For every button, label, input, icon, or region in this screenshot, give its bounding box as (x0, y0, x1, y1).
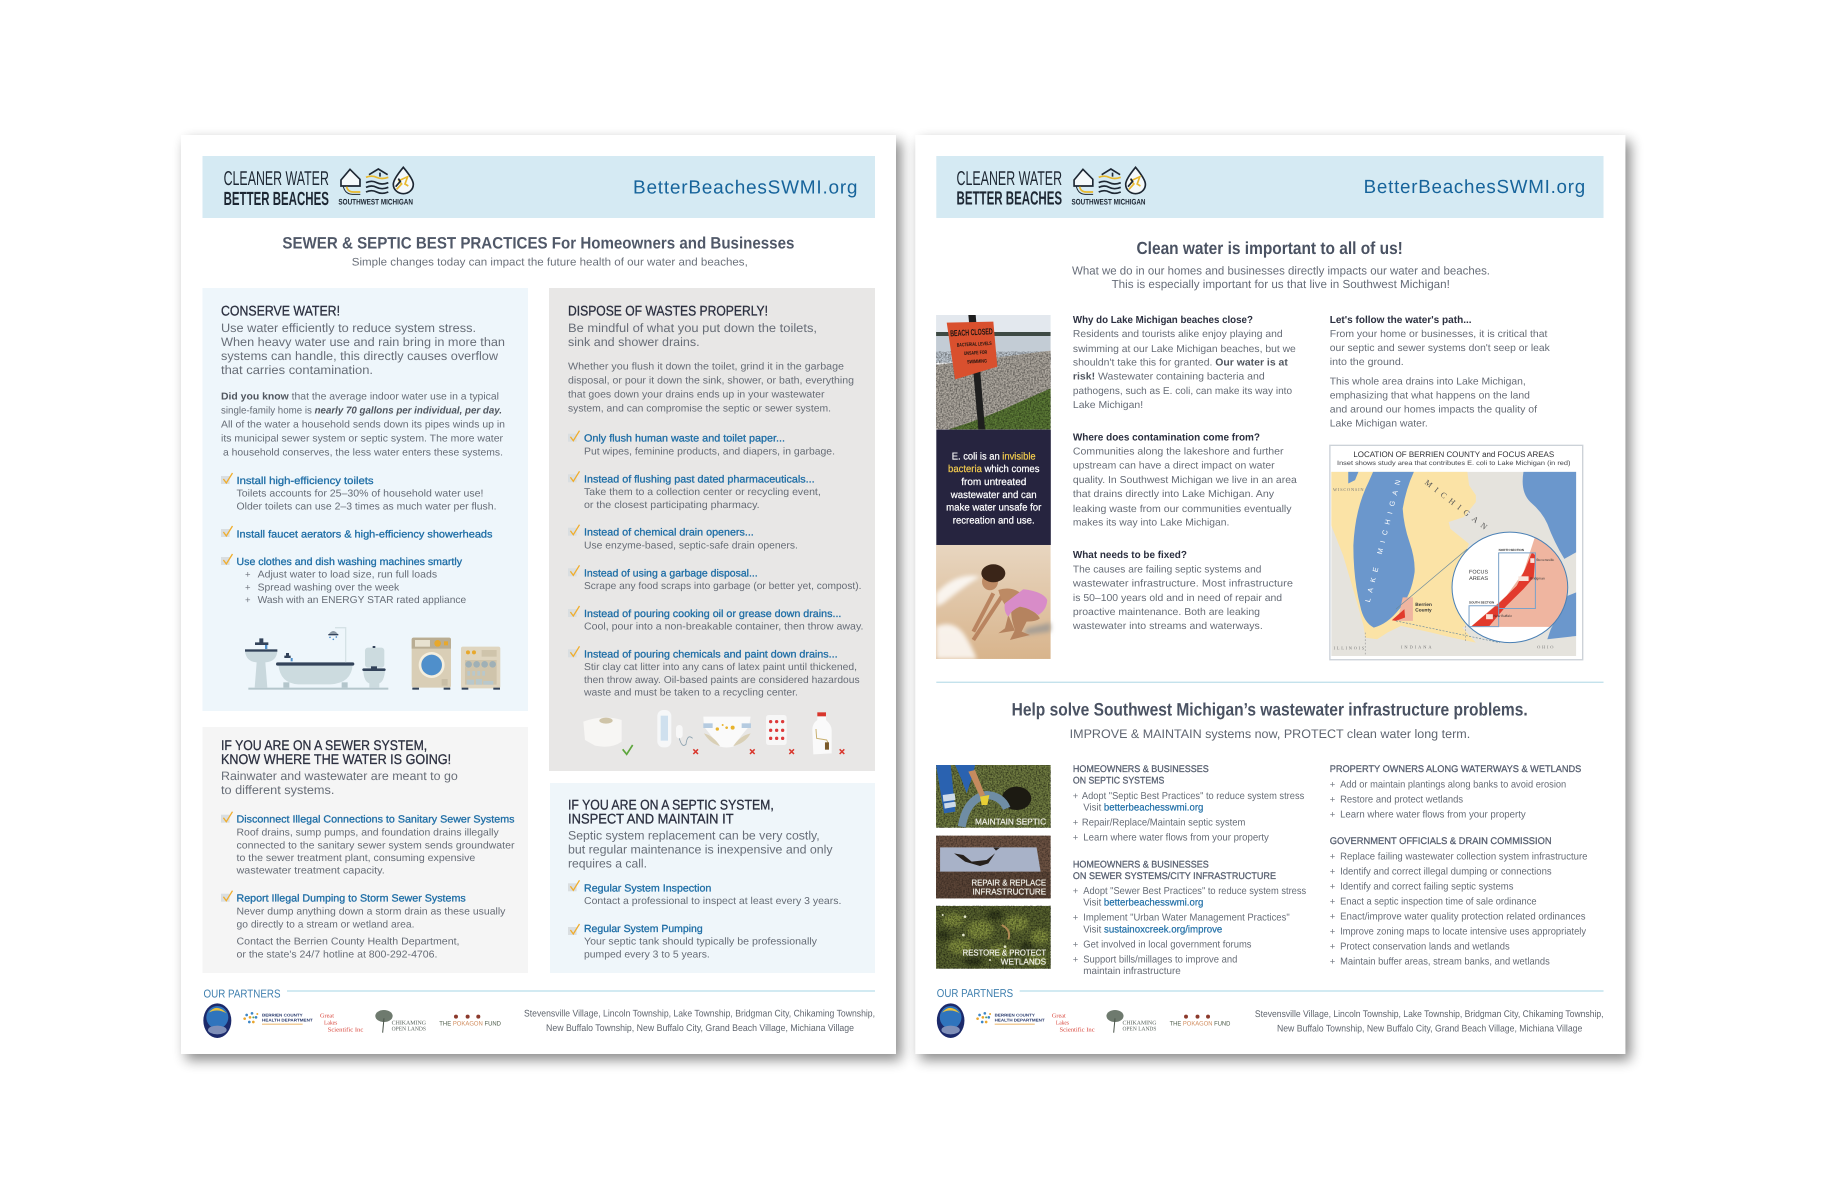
heading: sewer system: KNOW WHERE THE WATER IS GOING! (221, 751, 451, 767)
checklist: pharmaceuticals (568, 471, 821, 511)
did you know text: All of the water a household sends down its pipes winds up in (221, 419, 505, 430)
actions: property owners: + (1330, 794, 1336, 805)
photo: beach closed sign (936, 315, 1051, 429)
checklist: faucets (221, 526, 492, 540)
text column: why and where (1072, 315, 1297, 632)
heading: septic system: IF YOU ARE ON A SEPTIC SYSTEM, (568, 796, 774, 812)
map: Berrien County and focus areas: AREAS (1469, 576, 1488, 581)
lead text: When heavy water use and rain bring in more than (221, 335, 505, 349)
checklist: washing machines (221, 554, 467, 606)
page shadow: right (920, 141, 1630, 1060)
logo (957, 167, 1146, 210)
callout: e. coli: E. coli is an invisible (952, 451, 1036, 462)
logo: BETTER BEACHES (224, 189, 329, 210)
did you know text: a household conserves, the less water enters these systems. (223, 447, 503, 458)
checklist: cooking oil: Cool, pour into a non-breakable container, then throw away. (584, 622, 863, 633)
map: Berrien County and focus areas: NORTH SECTION (1499, 549, 1524, 552)
partners section: OUR PARTNERS (937, 988, 1013, 1000)
where does contamination come from: upstream can have a direct impact on water (1073, 461, 1275, 472)
checklist: chemicals and paint: Instead of pouring chemicals and paint down drains... (584, 649, 838, 660)
why do beaches close: Lake Michigan! (1073, 400, 1143, 411)
actions: sewer homeowners: ON SEWER SYSTEMS/CITY INFRASTRUCTURE (1073, 871, 1276, 882)
lead text: Septic system replacement can be very costly, (568, 828, 820, 842)
text column: water's path: From your home or businesses, it is critical that (1330, 329, 1548, 340)
checklist: toilets: Install high-efficiency toilets (236, 476, 374, 487)
actions: government officials: Improve zoning maps to locate intensive uses appropriately (1340, 927, 1586, 938)
logo (224, 167, 413, 210)
actions: septic homeowners: Visit betterbeachesswmi.org (1083, 803, 1203, 814)
logo: SOUTHWEST MICHIGAN (1072, 198, 1146, 207)
photo: beach closed sign: BACTERIAL LEVELS (957, 341, 992, 348)
why do beaches close: shouldn't take this for granted. Our water is at (1073, 357, 1289, 368)
text column: water's path: emphasizing that what happens on the land (1330, 391, 1530, 402)
checklist: illegal connections: connected to the sanitary sewer system sends groundwater (236, 840, 515, 851)
partners section: OUR PARTNERS (204, 988, 281, 1000)
logo: CLEANER WATER (224, 168, 329, 190)
map: Berrien County and focus areas: Inset shows study area that contributes E. coli to Lake Michigan (in red) (1337, 460, 1570, 467)
subheading: improve and maintain: IMPROVE & MAINTAIN systems now, PROTECT clean water long term. (1070, 727, 1470, 741)
lead text: Use water efficiently to reduce system stress. (221, 321, 476, 335)
did you know text: Did you know that the average indoor water use in a typical (221, 391, 499, 402)
body text: Whether you flush it down the toilet, grind it in the garbage (568, 361, 844, 372)
lead text: Rainwater and wastewater are meant to go (221, 769, 458, 783)
photo: beach closed sign: UNSAFE FOR (964, 349, 987, 356)
checklist: garbage disposal (568, 565, 862, 592)
text column: water's path: Let's follow the water's path... (1330, 315, 1472, 326)
photo: beach closed sign: SWIMMING (967, 358, 987, 365)
callout: e. coli: bacteria which comes (948, 464, 1039, 475)
actions: government officials: GOVERNMENT OFFICIALS & DRAIN COMMISSION (1330, 836, 1552, 847)
actions: sewer homeowners (1073, 859, 1306, 977)
callout: e. coli: make water unsafe for (946, 503, 1042, 514)
what needs to be fixed: proactive maintenance. Both are leaking (1073, 607, 1260, 618)
photo: repair and replace infrastructure (936, 836, 1051, 898)
map: Berrien County and focus areas: Stevensville (1536, 559, 1554, 562)
actions: government officials: + (1330, 957, 1336, 968)
photo: beach closed sign: BEACH CLOSED (950, 326, 993, 338)
did you know text: single-family home is nearly 70 gallons per individual, per day. (221, 405, 502, 416)
actions: sewer homeowners: maintain infrastructure (1083, 966, 1181, 977)
lead text (568, 321, 817, 349)
logo: CLEANER WATER (957, 168, 1062, 190)
checklist: chemicals and paint (568, 646, 860, 699)
body text (568, 361, 854, 414)
checklist: cooking oil: Instead of pouring cooking oil or grease down drains... (584, 609, 841, 620)
partners section: New Buffalo Township, New Buffalo City, Grand Beach Village, Michiana Village (546, 1023, 854, 1034)
map: Berrien County and focus areas: County (1415, 607, 1432, 613)
what needs to be fixed: wastewater into streams and waterways. (1072, 621, 1263, 632)
actions: government officials: + (1330, 911, 1336, 922)
checklist: pumping: Your septic tank should typically be professionally (584, 937, 817, 948)
actions: government officials: + (1330, 866, 1336, 877)
partners section (937, 988, 1604, 1038)
actions: sewer homeowners: HOMEOWNERS & BUSINESSES (1073, 859, 1209, 870)
actions: sewer homeowners: Adopt "Sewer Best Practices" to reduce system stress (1083, 886, 1306, 897)
actions: government officials: + (1330, 896, 1336, 907)
lead text: Be mindful of what you put down the toilets, (568, 321, 817, 335)
lead text (221, 321, 505, 377)
actions: septic homeowners: Learn where water flows from your property (1083, 833, 1269, 844)
checklist: pumping (568, 924, 817, 961)
checklist: illegal dumping (221, 891, 505, 960)
checklist: inspection (568, 880, 841, 907)
lead text: systems can handle, this directly causes overflow (221, 349, 498, 363)
lead text (568, 828, 834, 870)
map: Berrien County and focus areas: FOCUS (1469, 569, 1488, 575)
where does contamination come from (1073, 433, 1297, 529)
why do beaches close: Residents and tourists alike enjoy playing and (1073, 329, 1283, 340)
photo: child on beach (936, 545, 1051, 659)
actions: property owners: + (1330, 809, 1336, 820)
checklist: chemicals and paint: waste and must be taken to a recycling center. (583, 688, 798, 699)
lead text (221, 769, 458, 797)
illustration: bathroom and appliances (245, 628, 500, 690)
header band (936, 156, 1604, 218)
where does contamination come from: leaking waste from our communities eventually (1073, 504, 1292, 515)
map: Berrien County and focus areas: New Buffalo (1494, 615, 1512, 618)
partners section: New Buffalo Township, New Buffalo City, Grand Beach Village, Michiana Village (1277, 1023, 1582, 1034)
checklist: chemicals and paint: Stir clay cat litter into any cans of latex paint until thickened, (584, 662, 857, 673)
header band (202, 156, 875, 218)
checklist: toilets: Older toilets can use 2–3 times as much water per flush. (236, 501, 496, 512)
map: Berrien County and focus areas (1330, 445, 1583, 660)
what needs to be fixed (1072, 550, 1293, 632)
checklist: washing machines: + (245, 582, 251, 593)
heading: sewer system (221, 737, 451, 767)
actions: sewer homeowners: + (1073, 913, 1079, 924)
what needs to be fixed: The causes are failing septic systems and (1073, 564, 1261, 576)
website url: BetterBeachesSWMI.org (633, 177, 858, 198)
actions: property owners (1330, 764, 1581, 820)
heading: septic system (568, 796, 774, 826)
page: clean water is important (915, 135, 1625, 1054)
checklist: inspection: Contact a professional to inspect at least every 3 years. (584, 896, 841, 907)
text column: water's path (1330, 315, 1551, 429)
checklist: illegal connections: Disconnect Illegal Connections to Sanitary Sewer Systems (236, 815, 514, 826)
checklist: illegal connections: wastewater treatment capacity. (235, 866, 385, 877)
checklist: washing machines: Spread washing over the week (258, 582, 400, 593)
photo: repair and replace infrastructure: REPAIR & REPLACE (972, 877, 1046, 887)
checklist: pharmaceuticals: Instead of flushing past dated pharmaceuticals... (584, 474, 815, 485)
actions: government officials: + (1330, 851, 1336, 862)
intro text (1072, 264, 1490, 291)
checklist: pumping: pumped every 3 to 5 years. (584, 950, 710, 961)
actions: government officials: + (1330, 927, 1336, 938)
checklist: toilet paper: Put wipes, feminine products, and diapers, in garbage. (584, 446, 835, 457)
callout: e. coli (936, 430, 1051, 545)
checklist: pumping: Regular System Pumping (584, 924, 703, 935)
actions: sewer homeowners: Support bills/millages to improve and (1083, 955, 1237, 966)
actions: sewer homeowners: Visit sustainoxcreek.org/improve (1083, 924, 1223, 935)
partners section (203, 988, 875, 1038)
map: Berrien County and focus areas: LOCATION OF BERRIEN COUNTY and FOCUS AREAS (1353, 450, 1554, 459)
heading: help solve: Help solve Southwest Michigan’s wastewater infrastructure problems. (1012, 699, 1528, 719)
actions: property owners: PROPERTY OWNERS ALONG WATERWAYS & WETLANDS (1330, 764, 1581, 775)
checklist: illegal connections (221, 812, 515, 877)
actions: sewer homeowners: Get involved in local government forums (1083, 939, 1252, 950)
checklist: toilets (221, 473, 496, 512)
checklist: illegal dumping: Report Illegal Dumping to Storm Sewer Systems (236, 894, 466, 905)
actions: sewer homeowners: + (1073, 886, 1079, 897)
why do beaches close (1073, 315, 1296, 411)
callout: e. coli: from untreated (961, 477, 1026, 488)
did you know text (221, 391, 505, 458)
photo: restore and protect wetlands: RESTORE & PROTECT (963, 947, 1047, 957)
panel: conserve water (202, 288, 528, 711)
photo: repair and replace infrastructure: INFRASTRUCTURE (972, 887, 1046, 897)
map: Berrien County and focus areas: SOUTH SECTION (1469, 601, 1494, 604)
heading: conserve water: CONSERVE WATER! (221, 302, 340, 318)
text column: water's path: This whole area drains into Lake Michigan, (1330, 377, 1526, 388)
map: Berrien County and focus areas: Bridgman (1530, 577, 1545, 581)
checklist: pharmaceuticals: Take them to a collection center or recycling event, (584, 487, 821, 498)
intro text: What we do in our homes and businesses directly impacts our water and beaches. (1072, 264, 1490, 277)
actions: property owners: Restore and protect wetlands (1340, 794, 1463, 805)
intro text: This is especially important for us that live in Southwest Michigan! (1112, 278, 1450, 291)
photo: maintain septic (936, 765, 1051, 828)
map: Berrien County and focus areas: OHIO (1537, 645, 1553, 650)
lead text: that carries contamination. (221, 363, 373, 377)
checklist: pharmaceuticals: or the closest participating pharmacy. (584, 500, 760, 511)
photo: restore and protect wetlands: WETLANDS (1001, 957, 1046, 967)
where does contamination come from: Communities along the lakeshore and further (1073, 447, 1284, 458)
actions: government officials: Protect conservation lands and wetlands (1340, 942, 1510, 953)
text column: water's path: our septic and sewer systems don't seep or leak (1330, 343, 1551, 354)
actions: government officials: Identify and correct failing septic systems (1340, 881, 1513, 892)
panel: sewer system (202, 727, 528, 973)
checklist: washing machines: Adjust water to load size, run full loads (258, 570, 437, 581)
photo: maintain septic: MAINTAIN SEPTIC (975, 816, 1046, 826)
panel: dispose of wastes (549, 288, 875, 771)
actions: government officials: Identify and correct illegal dumping or connections (1340, 866, 1552, 877)
why do beaches close: risk! Wastewater containing bacteria and (1073, 371, 1265, 382)
logo: BETTER BEACHES (957, 188, 1062, 210)
website url: BetterBeachesSWMI.org (1364, 177, 1585, 198)
checklist: toilet paper (568, 431, 835, 457)
checklist: illegal dumping: go directly to a stream or wetland area. (236, 919, 414, 930)
what needs to be fixed: What needs to be fixed? (1073, 550, 1187, 561)
actions: septic homeowners: + (1073, 791, 1079, 802)
title: SEWER & SEPTIC BEST PRACTICES For Homeowners and Businesses (282, 235, 794, 253)
body text: system, and can compromise the septic or sewer system. (568, 403, 831, 414)
checklist: washing machines: + (245, 595, 251, 606)
actions: government officials: Enact a septic inspection time of sale ordinance (1340, 896, 1537, 907)
checklist: illegal dumping: or the state's 24/7 hotline at 800-292-4706. (236, 949, 438, 960)
map: Berrien County and focus areas: LAKE MICHIGAN (1364, 479, 1402, 603)
checklist: drain openers: Use enzyme-based, septic-safe drain openers. (584, 540, 798, 551)
checklist: inspection: Regular System Inspection (584, 883, 712, 894)
actions: septic homeowners: HOMEOWNERS & BUSINESSES (1073, 764, 1209, 775)
photo: restore and protect wetlands (936, 906, 1051, 969)
checklist: garbage disposal: Instead of using a garbage disposal... (584, 568, 758, 579)
what needs to be fixed: is 50–100 years old and in need of repair and (1073, 593, 1282, 604)
lead text: to different systems. (221, 783, 334, 797)
map: Berrien County and focus areas: WISCONSIN (1333, 487, 1364, 492)
actions: septic homeowners: + (1073, 818, 1079, 829)
partners section: Stevensville Village, Lincoln Township, Lake Township, Bridgman City, Chikaming Township, (1255, 1009, 1604, 1020)
panel: septic system (550, 783, 875, 973)
page shadow: left (186, 141, 901, 1060)
heading: septic system: INSPECT AND MAINTAIN IT (568, 810, 734, 826)
actions: septic homeowners: ON SEPTIC SYSTEMS (1073, 776, 1164, 787)
checklist: illegal connections: to the sewer treatment plant, consuming expensive (236, 853, 476, 864)
map: Berrien County and focus areas: ILLINOIS (1334, 645, 1364, 650)
checklist: drain openers (568, 525, 798, 551)
checklist: drain openers: Instead of chemical drain openers... (584, 528, 754, 539)
checklist: illegal dumping: Never dump anything down a storm drain as these usually (236, 907, 505, 918)
checklist: faucets: Install faucet aerators & high-efficiency showerheads (236, 529, 492, 540)
subtitle: Simple changes today can impact the future health of our water and beaches, (352, 257, 748, 269)
checklist: illegal dumping: Contact the Berrien County Health Department, (236, 937, 460, 948)
text column: water's path: into the ground. (1330, 357, 1404, 368)
callout: e. coli: wastewater and can (950, 490, 1037, 501)
title: clean water: Clean water is important to all of us! (1137, 238, 1403, 258)
where does contamination come from: that drains directly into Lake Michigan. Any (1073, 489, 1274, 500)
actions: sewer homeowners: Visit betterbeachesswmi.org (1083, 898, 1203, 909)
partners section: Stevensville Village, Lincoln Township, Lake Township, Bridgman City, Chikaming Township, (524, 1009, 875, 1020)
why do beaches close: pathogens, such as E. coli, can make its way into (1073, 386, 1292, 397)
page: sewer and septic best practices (181, 135, 896, 1054)
checklist: toilet paper: Only flush human waste and toilet paper... (584, 434, 785, 445)
map: Berrien County and focus areas: INDIANA (1401, 645, 1432, 650)
body text: disposal, or pour it down the sink, shower, or bath, everything (568, 375, 854, 386)
lead text: requires a call. (568, 856, 647, 870)
actions: sewer homeowners: + (1073, 939, 1079, 950)
actions: property owners: Add or maintain plantings along banks to avoid erosion (1340, 779, 1566, 790)
actions: septic homeowners: Adopt "Septic Best Practices" to reduce system stress (1082, 791, 1304, 802)
what needs to be fixed: wastewater infrastructure. Most infrastructure (1072, 578, 1293, 589)
actions: sewer homeowners: + (1073, 955, 1079, 966)
body text: that goes down your drains ends up in your wastewater (568, 389, 825, 400)
actions: government officials: Maintain buffer areas, stream banks, and wetlands (1340, 957, 1550, 968)
actions: sewer homeowners: Implement "Urban Water Management Practices" (1083, 913, 1290, 924)
actions: property owners: Learn where water flows from your property (1340, 809, 1526, 820)
divider (936, 682, 1604, 683)
icons: flushable and non-flushable items (583, 710, 844, 754)
actions: septic homeowners: + (1073, 833, 1079, 844)
actions: government officials: Replace failing wastewater collection system infrastructure (1340, 851, 1588, 862)
why do beaches close: Why do Lake Michigan beaches close? (1073, 315, 1253, 326)
map: Berrien County and focus areas: MICHIGAN (1423, 478, 1489, 532)
lead text: but regular maintenance is inexpensive and only (568, 842, 834, 856)
checklist: cooking oil (568, 606, 863, 633)
where does contamination come from: Where does contamination come from? (1073, 433, 1260, 444)
text column: water's path: and around our homes impacts the quality of (1330, 404, 1537, 416)
heading: sewer system: IF YOU ARE ON A SEWER SYSTEM, (221, 737, 427, 753)
heading: dispose of wastes: DISPOSE OF WASTES PROPERLY! (568, 302, 768, 318)
why do beaches close: swimming at our Lake Michigan beaches, but we (1073, 344, 1296, 355)
checklist: washing machines: Wash with an ENERGY STAR rated appliance (258, 595, 467, 606)
actions: septic homeowners (1073, 764, 1304, 844)
actions: government officials (1330, 836, 1588, 968)
where does contamination come from: quality. In Southwest Michigan we live in an area (1073, 475, 1297, 486)
checklist: washing machines: + (245, 570, 251, 581)
logo: SOUTHWEST MICHIGAN (338, 197, 413, 206)
where does contamination come from: makes its way into Lake Michigan. (1073, 518, 1229, 529)
text column: water's path: Lake Michigan water. (1330, 418, 1428, 429)
checklist: chemicals and paint: then throw away. Oil-based paints are considered hazardous (584, 675, 860, 686)
actions: government officials: + (1330, 942, 1336, 953)
actions: property owners: + (1330, 779, 1336, 790)
actions: government officials: Enact/improve water quality protection related ordinances (1340, 911, 1586, 922)
did you know text: its municipal sewer system or septic system. The more water (221, 433, 504, 444)
actions: government officials: + (1330, 881, 1336, 892)
checklist: toilets: Toilets accounts for 25–30% of household water use! (236, 489, 484, 500)
checklist: garbage disposal: Scrape any food scraps into garbage (or better yet, compost). (584, 581, 862, 592)
map: Berrien County and focus areas: Berrien (1415, 602, 1432, 607)
checklist: washing machines: Use clothes and dish washing machines smartly (236, 557, 463, 568)
checklist: illegal connections: Roof drains, sump pumps, and foundation drains illegally (236, 827, 499, 838)
lead text: sink and shower drains. (568, 335, 700, 349)
callout: e. coli: recreation and use. (953, 516, 1035, 527)
actions: septic homeowners: Repair/Replace/Maintain septic system (1082, 818, 1245, 829)
